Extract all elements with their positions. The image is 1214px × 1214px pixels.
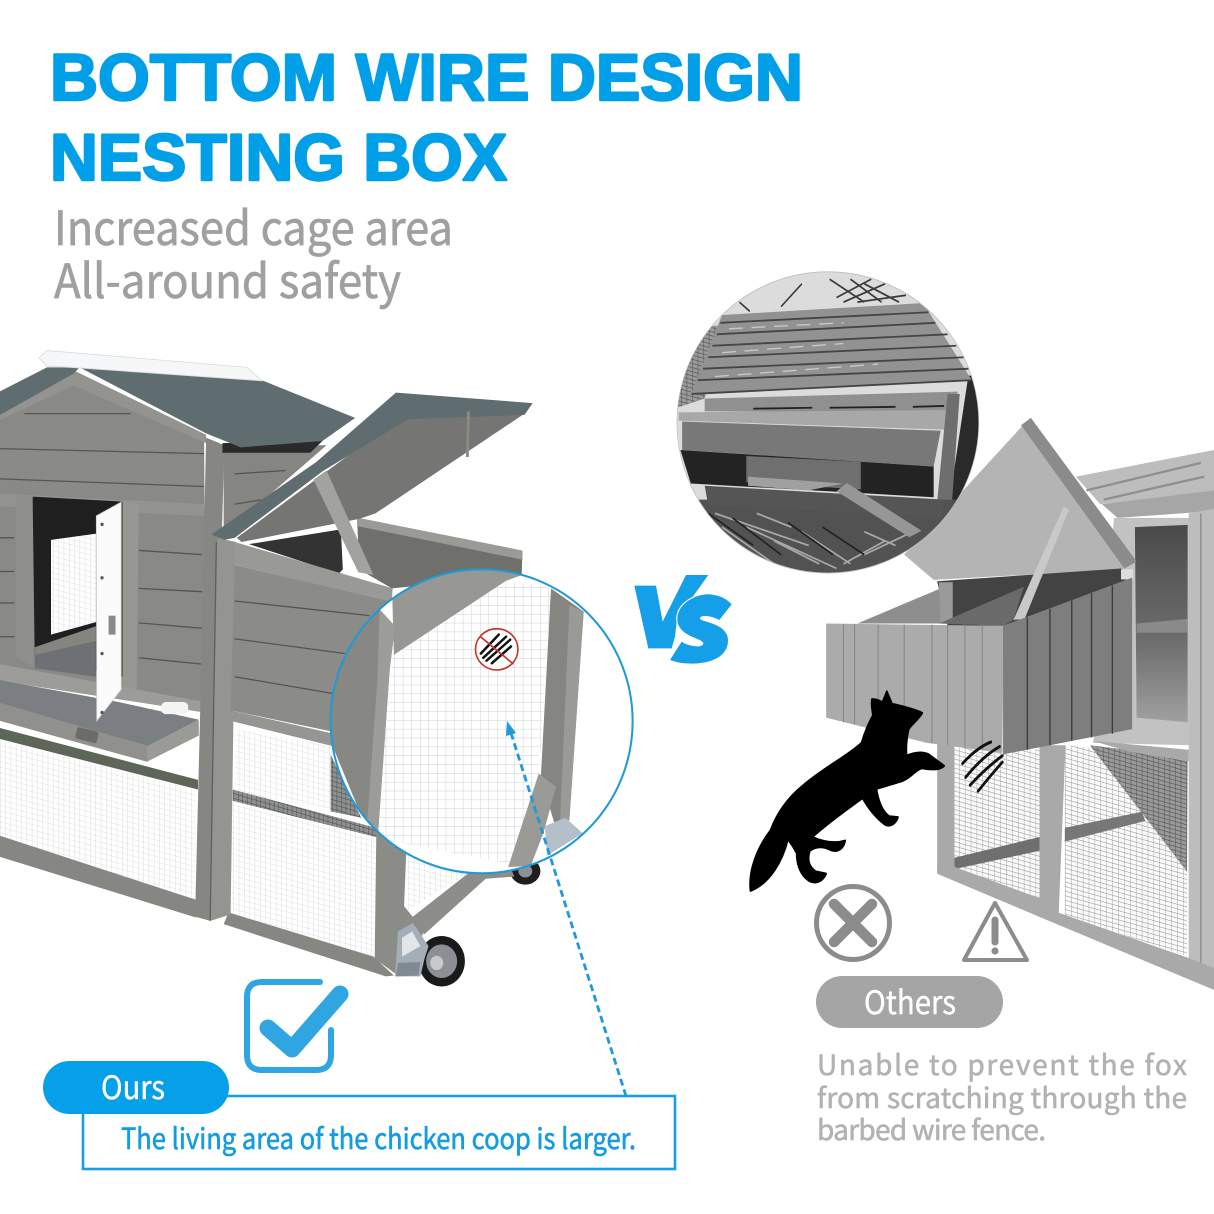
title: NESTING BOX xyxy=(50,120,507,194)
fox silhouette xyxy=(750,691,944,891)
front caster xyxy=(395,923,465,986)
VS badge xyxy=(634,575,732,664)
callout: ours xyxy=(43,1061,675,1169)
front corner post xyxy=(375,832,424,976)
main roof xyxy=(0,351,355,447)
panel: other coop xyxy=(670,270,1214,990)
open lid underside xyxy=(904,418,1137,580)
nesting box front xyxy=(231,542,393,746)
pill: ours xyxy=(43,1061,229,1114)
subtitle: Increased cage area xyxy=(54,190,453,259)
arrow: dashed pointer xyxy=(506,721,626,1096)
nesting box interior xyxy=(857,506,1133,626)
panel: our coop xyxy=(0,351,633,986)
title xyxy=(50,40,803,194)
callout: ours: Ours xyxy=(101,1063,165,1109)
bottom frame rails xyxy=(0,836,394,976)
rear wheel xyxy=(410,858,540,934)
icon: warning triangle xyxy=(964,903,1027,960)
photo inset: competitor box xyxy=(670,270,982,578)
title: BOTTOM WIRE DESIGN xyxy=(50,40,803,114)
description: others: from scratching through the xyxy=(817,1077,1187,1117)
tray xyxy=(0,664,204,762)
magnifier lens: wire close-up xyxy=(327,548,633,873)
description: others: Unable to prevent the fox xyxy=(817,1044,1187,1084)
house wall xyxy=(0,370,206,710)
side wall under roof xyxy=(222,441,327,538)
icon: no scratching xyxy=(476,629,518,670)
raised lid xyxy=(211,393,533,575)
wooden run frame xyxy=(937,741,1214,990)
nesting box interior xyxy=(249,518,522,588)
description: others xyxy=(817,1044,1187,1149)
pill: others: Others xyxy=(864,978,956,1024)
photo inset ring xyxy=(677,272,979,573)
scratch marks xyxy=(962,742,1002,791)
doorway with mesh xyxy=(33,497,122,677)
icon: check mark xyxy=(247,982,340,1070)
wire mesh run xyxy=(954,745,1188,956)
description: others: barbed wire fence. xyxy=(817,1109,1046,1149)
corner post xyxy=(195,438,236,921)
wire mesh panels xyxy=(0,728,469,957)
far roof and house xyxy=(1076,450,1214,990)
subtitle xyxy=(54,190,453,312)
subtitle: All-around safety xyxy=(54,243,401,312)
pill: others xyxy=(816,976,1003,1028)
icon: cross in circle xyxy=(816,886,890,960)
nesting box front xyxy=(826,578,1132,754)
callout: ours: The living area of the chicken coop is larger. xyxy=(121,1116,636,1158)
open white door xyxy=(96,502,121,721)
